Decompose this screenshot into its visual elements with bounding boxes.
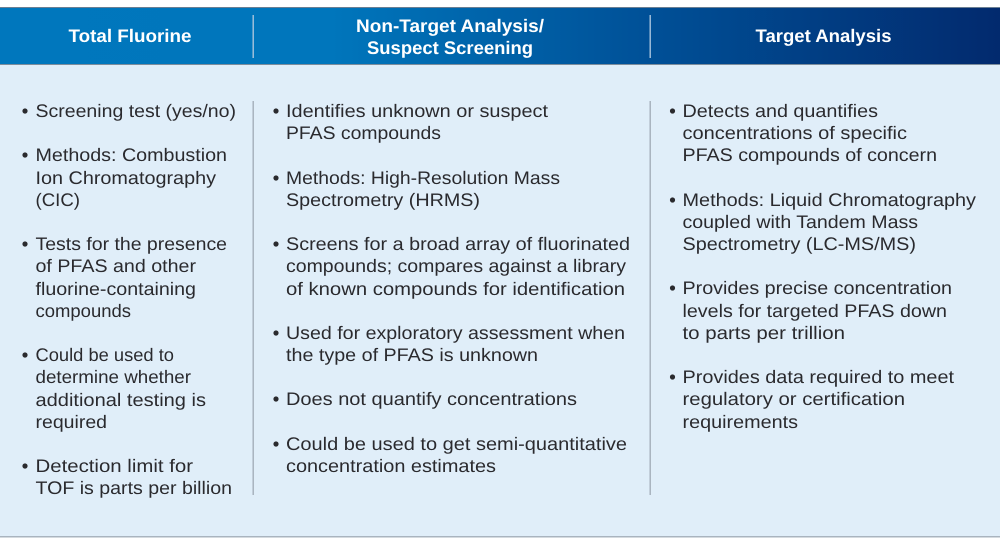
- text block: Non-Target Analysis bullets: Methods: High-Resolution Mass: [286, 168, 560, 188]
- text block: Total Fluorine bullets: compounds: [36, 301, 131, 321]
- heading: Non-Target Analysis / Suspect Screening: Suspect Screening: [367, 38, 533, 58]
- text block: Total Fluorine bullets: [22, 101, 236, 498]
- heading: Target Analysis: Target Analysis: [756, 26, 892, 46]
- text block: Target Analysis bullets: concentrations of specific: [682, 123, 907, 143]
- text block: Total Fluorine bullets: Ion Chromatography: [36, 168, 217, 188]
- text block: Non-Target Analysis bullets: PFAS compounds: [286, 123, 441, 143]
- heading: Non-Target Analysis / Suspect Screening: [356, 16, 544, 58]
- text block: Non-Target Analysis bullets: compounds; compares against a library: [286, 256, 627, 276]
- text block: Target Analysis bullets: levels for targeted PFAS down: [682, 301, 947, 321]
- text block: Target Analysis bullets: Detects and quantifies: [682, 101, 878, 121]
- text block: Target Analysis bullets: to parts per trillion: [682, 323, 845, 343]
- text block: Non-Target Analysis bullets: the type of PFAS is unknown: [286, 345, 538, 365]
- text block: Total Fluorine bullets: (CIC): [36, 190, 80, 210]
- text block: Non-Target Analysis bullets: concentration estimates: [286, 456, 496, 476]
- text block: Target Analysis bullets: [670, 101, 977, 432]
- text block: Target Analysis bullets: PFAS compounds of concern: [682, 145, 937, 165]
- text block: Non-Target Analysis bullets: [273, 101, 630, 476]
- text block: Total Fluorine bullets: TOF is parts per billion: [36, 478, 232, 498]
- text block: Non-Target Analysis bullets: Spectrometry (HRMS): [286, 190, 480, 210]
- text block: Non-Target Analysis bullets: Screens for a broad array of fluorinated: [286, 234, 630, 254]
- panel: header band: [0, 7, 1000, 65]
- text block: Non-Target Analysis bullets: Does not quantify concentrations: [286, 389, 577, 409]
- text block: Total Fluorine bullets: additional testing is: [36, 390, 206, 410]
- text block: Total Fluorine bullets: determine whether: [36, 367, 191, 387]
- text block: Total Fluorine bullets: fluorine-containing: [36, 279, 196, 299]
- text block: Target Analysis bullets: Provides data required to meet: [682, 367, 954, 387]
- text block: Total Fluorine bullets: of PFAS and other: [36, 256, 196, 276]
- text block: Non-Target Analysis bullets: Identifies unknown or suspect: [286, 101, 548, 121]
- text block: Total Fluorine bullets: Tests for the presence: [36, 234, 227, 254]
- text block: Total Fluorine bullets: Could be used to: [36, 345, 174, 365]
- text block: Non-Target Analysis bullets: of known compounds for identification: [286, 279, 625, 299]
- column dividers: [252, 101, 651, 495]
- text block: Total Fluorine bullets: Methods: Combustion: [36, 145, 227, 165]
- text block: Total Fluorine bullets: required: [36, 412, 107, 432]
- text block: Non-Target Analysis bullets: Used for exploratory assessment when: [286, 323, 625, 343]
- text block: Target Analysis bullets: regulatory or certification: [682, 389, 905, 409]
- text block: Target Analysis bullets: requirements: [682, 412, 798, 432]
- text block: Total Fluorine bullets: Detection limit for: [36, 456, 193, 476]
- text block: Target Analysis bullets: coupled with Tandem Mass: [682, 212, 918, 232]
- text block: Total Fluorine bullets: Screening test (yes/no): [36, 101, 236, 121]
- text block: Non-Target Analysis bullets: Could be used to get semi-quantitative: [286, 434, 627, 454]
- text block: Target Analysis bullets: Spectrometry (LC-MS/MS): [682, 234, 916, 254]
- text block: Target Analysis bullets: Provides precise concentration: [682, 278, 952, 298]
- heading: Total Fluorine: Total Fluorine: [68, 26, 192, 46]
- heading: Non-Target Analysis / Suspect Screening: Non-Target Analysis/: [356, 16, 544, 36]
- text block: Target Analysis bullets: Methods: Liquid Chromatography: [682, 190, 977, 210]
